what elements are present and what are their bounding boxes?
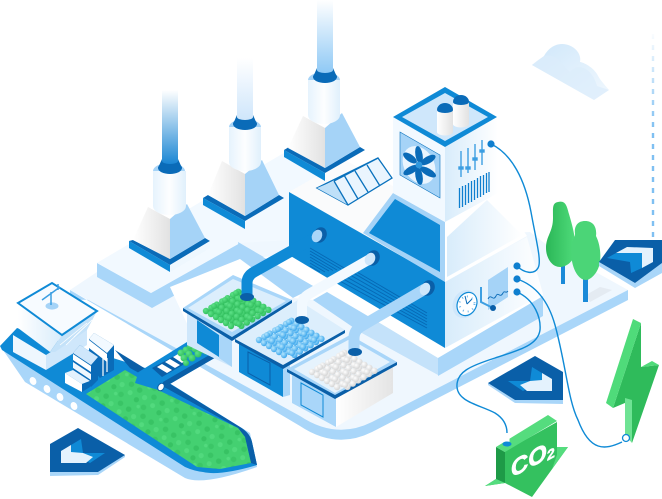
green balls: [203, 289, 272, 329]
portholes: [28, 376, 79, 411]
chimney 2: [203, 58, 284, 229]
hull: [3, 329, 257, 480]
front stack: [73, 345, 98, 387]
plinth: [438, 294, 543, 358]
tree 1: [561, 255, 570, 284]
lower cabin: [13, 329, 87, 370]
middle right face: [445, 193, 527, 282]
arrow plate: right: [599, 240, 662, 288]
blue wall: [289, 192, 445, 348]
ship: [0, 283, 257, 480]
skylight: [317, 158, 392, 205]
lower right face: [445, 237, 543, 348]
arrow plate: ship: [50, 428, 125, 476]
green cargo: [86, 370, 251, 469]
tower: [363, 87, 543, 348]
roof cylinder 2: [453, 102, 469, 128]
cable connectors: [487, 140, 630, 446]
sliders: [459, 140, 484, 177]
gauge: [448, 286, 482, 322]
chimney 1: [129, 90, 210, 272]
slab under chimneys: [97, 153, 340, 308]
vents: [310, 248, 427, 328]
box 2: blue: [235, 300, 345, 397]
middle left face: [363, 193, 445, 282]
chevrons: [152, 353, 188, 377]
pipe 2: [295, 248, 382, 324]
lever: [481, 287, 493, 308]
roof: [289, 160, 445, 282]
deck: [0, 328, 257, 473]
green pile on conveyor: [178, 338, 210, 366]
lightning bolt: [606, 319, 659, 443]
upper cabin: [18, 303, 62, 352]
upper left face: [393, 117, 445, 222]
box 3: white: [287, 335, 397, 427]
co2 label: 2: [547, 445, 555, 465]
dotted line: [652, 34, 654, 238]
mast: [42, 284, 60, 310]
tree 2: [583, 270, 594, 302]
cargo crates: [65, 333, 114, 392]
barcode: [460, 172, 489, 208]
wave line: [488, 291, 508, 299]
pipe 1: [240, 225, 329, 301]
back stack: [89, 333, 114, 378]
factory block: [289, 160, 543, 376]
co2 label: CO: [511, 438, 547, 484]
walkways: [170, 242, 460, 375]
cables: [457, 144, 622, 447]
trees: [546, 202, 600, 302]
pipe 3: [348, 278, 437, 356]
white balls: [309, 350, 378, 390]
fan blades: [401, 146, 438, 185]
fan panel: [400, 132, 440, 198]
platform: main floor: [70, 153, 628, 440]
co2 arrow sign: [485, 415, 568, 497]
cloud: [532, 44, 609, 100]
roof cylinder 1: [437, 110, 453, 136]
roof frame: [393, 87, 497, 147]
conveyor: [137, 338, 218, 392]
chimney 3: [284, 0, 365, 181]
upper right face: [445, 117, 498, 222]
bottom crate: [65, 373, 82, 392]
arrow plate: center: [488, 356, 563, 404]
monitor panel: [488, 267, 508, 310]
blue balls: [256, 318, 325, 358]
box 1: green: [183, 275, 292, 367]
